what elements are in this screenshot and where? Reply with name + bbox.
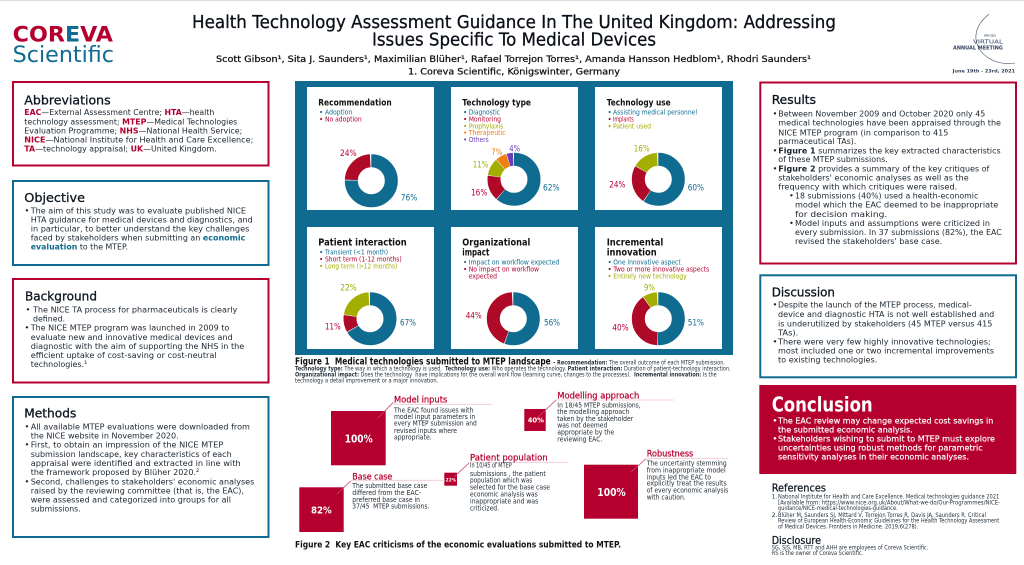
methods text: • bbox=[24, 422, 29, 432]
heading: objective: Objective bbox=[24, 190, 85, 205]
results text: Model inputs and assumptions were criticized in bbox=[795, 218, 990, 228]
methods text: Second, challenges to stakeholders' economic analyses bbox=[31, 476, 254, 486]
discussion text: device and diagnostic HTA is not well established and bbox=[778, 309, 994, 319]
discussion text: • bbox=[772, 300, 777, 310]
card: patient interaction: 11% bbox=[325, 322, 341, 332]
card: recommendation: Recommendation bbox=[318, 98, 392, 108]
card: patient interaction: Long term (>12 months) bbox=[325, 262, 397, 271]
background text: The NICE TA process for pharmaceuticals is clearly bbox=[32, 305, 237, 315]
results text: frequency with which critiques were raised. bbox=[778, 181, 957, 191]
title bbox=[192, 12, 836, 50]
references: 2. bbox=[772, 512, 778, 519]
donut: technology use bbox=[638, 159, 678, 199]
objective text: HTA guidance for medical devices and diagnostics, and bbox=[31, 215, 253, 225]
card: patient interaction: • bbox=[319, 248, 323, 257]
card: patient interaction: • bbox=[319, 262, 323, 271]
references: [Available from: https://www.nice.org.uk/About/What-we-do/Our-Programmes/NICE- bbox=[778, 500, 1000, 507]
objective text: in particular, to better understand the key challenges bbox=[31, 224, 249, 234]
figure 1 caption: Figure 1 Medical technologies submitted to MTEP landscape bbox=[295, 357, 551, 368]
authors bbox=[216, 55, 811, 78]
panel: methods bbox=[13, 397, 268, 537]
callout: modelling approach: 40% bbox=[528, 417, 544, 425]
callout: modelling approach bbox=[524, 390, 674, 444]
card: technology use bbox=[595, 87, 722, 210]
abbreviations text: NICE—National Institute for Health and Care Excellence; bbox=[24, 134, 253, 144]
card: technology use: 16% bbox=[634, 145, 650, 155]
methods text: All available MTEP evaluations were downloaded from bbox=[31, 422, 250, 432]
callout: base case bbox=[299, 471, 445, 532]
callout: modelling approach: In 18/45 MTEP submissions, bbox=[557, 400, 641, 409]
background text: defined. bbox=[33, 314, 65, 324]
card: organizational impact: 56% bbox=[544, 319, 560, 329]
discussion text: • bbox=[772, 337, 777, 347]
results text: 18 submissions (40%) used a health-economic bbox=[795, 191, 979, 201]
callout: patient population: submissions , the patient bbox=[470, 469, 546, 478]
results text: • bbox=[772, 145, 777, 155]
background text: diagnostic with the aim of supporting the NHS in the bbox=[31, 341, 244, 351]
callout: patient population: In 10/45 of MTEP bbox=[470, 461, 512, 470]
card: patient interaction: 22% bbox=[340, 284, 357, 294]
callout: model inputs: revised inputs where bbox=[394, 426, 457, 435]
panel: figure 1 charts bbox=[295, 81, 733, 355]
card: technology type: Prophylaxis bbox=[469, 122, 504, 131]
figure 1 caption: Organizational impact: Does the technology have implications for the overall work flow (learning curve, changes to the processes). Incremental innovation: Is the bbox=[295, 372, 717, 379]
conclusion text: uncertainties using robust methods for parametric bbox=[778, 442, 983, 452]
card: technology type bbox=[451, 87, 578, 210]
references: guidance/NICE-medical-technologies-guidance. bbox=[778, 505, 898, 512]
logo: Coreva Scientific: Scientific bbox=[13, 43, 114, 68]
background text: evaluate new and innovative medical devices and bbox=[31, 332, 233, 342]
card: incremental innovation: • bbox=[608, 258, 612, 267]
results text: Figure 1 summarizes the key extracted characteristics bbox=[778, 145, 1001, 155]
card: incremental innovation: 51% bbox=[688, 319, 704, 329]
callout: model inputs: Model inputs bbox=[394, 394, 447, 405]
figure 2 caption: Figure 2 Key EAC criticisms of the economic evaluations submitted to MTEP. bbox=[295, 541, 621, 551]
results text: • bbox=[789, 218, 794, 228]
figure 1 caption bbox=[295, 357, 731, 384]
card: technology use: Patient used bbox=[613, 122, 651, 131]
donut: organizational impact bbox=[493, 299, 533, 339]
conclusion text: • bbox=[772, 433, 777, 443]
card: technology type: Therapeutic bbox=[468, 128, 506, 137]
donut: recommendation bbox=[351, 161, 391, 201]
card: incremental innovation bbox=[595, 227, 722, 349]
abbreviations text bbox=[24, 107, 253, 153]
logo: HTAi virtual annual meeting: HTAi 2021 bbox=[984, 34, 996, 38]
logo: HTAi virtual annual meeting: June 19th - 23rd, 2021 bbox=[952, 68, 1015, 74]
callout: model inputs: model input parameters in bbox=[394, 412, 475, 421]
callout: modelling approach: appropriate by the bbox=[557, 428, 615, 437]
callout: patient population: criticized. bbox=[470, 503, 499, 512]
methods text: the NICE website in November 2020. bbox=[31, 431, 179, 441]
heading: methods: Methods bbox=[24, 406, 76, 421]
methods text: the framework proposed by Blüher 2020.² bbox=[31, 467, 199, 477]
card: technology use: • bbox=[608, 108, 612, 117]
results text: • bbox=[772, 109, 777, 119]
card: technology type: Technology type bbox=[462, 98, 531, 108]
abbreviations text: TA—technology appraisal; UK—United Kingdom. bbox=[24, 143, 217, 153]
logo: HTAi virtual annual meeting bbox=[952, 14, 1015, 74]
methods text: submission landscape, key characteristics of each bbox=[31, 449, 232, 459]
card: organizational impact: Organizational bbox=[462, 237, 530, 248]
card: technology type: Others bbox=[469, 135, 489, 144]
card: incremental innovation: • bbox=[608, 265, 612, 274]
callout: robustness: from inappropriate model bbox=[647, 465, 726, 474]
heading: abbreviations: Abbreviations bbox=[24, 92, 111, 107]
logo: Coreva Scientific bbox=[13, 23, 114, 68]
card: organizational impact: No impact on workflow bbox=[469, 265, 539, 274]
heading: background: Background bbox=[25, 289, 97, 304]
card: patient interaction: 67% bbox=[400, 319, 416, 329]
authors: Scott Gibson¹, Sita J. Saunders¹, Maximilian Blüher¹, Rafael Torrejon Torres¹, Amanda Hansson Hedblom¹, Rhodri Saunders¹ bbox=[216, 55, 811, 65]
card: recommendation: 76% bbox=[401, 193, 417, 203]
discussion text: most included one or two incremental improvements bbox=[778, 346, 994, 356]
card: recommendation: • bbox=[319, 115, 323, 124]
callout: model inputs: The EAC found issues with bbox=[393, 405, 473, 414]
abbreviations text: Evaluation Programme; NHS—National Health Service; bbox=[24, 125, 242, 135]
results text: NICE MTEP program (in comparison to 415 bbox=[778, 127, 948, 137]
callout: robustness: of every economic analysis bbox=[647, 486, 728, 495]
card: incremental innovation: 9% bbox=[644, 284, 655, 294]
callout: patient population: selected for the base case bbox=[470, 483, 550, 492]
methods text: submissions. bbox=[31, 503, 81, 513]
disclosure: SG, SJS, MB, RTT and AHH are employees of Coreva Scientific. bbox=[772, 544, 928, 551]
card: technology type: Monitoring bbox=[469, 115, 501, 124]
card: organizational impact: 44% bbox=[466, 311, 482, 321]
heading: conclusion: Conclusion bbox=[772, 393, 873, 417]
card: technology use: • bbox=[608, 122, 612, 131]
callout: robustness: The uncertainty stemming bbox=[646, 458, 727, 467]
panel: objective bbox=[13, 181, 268, 265]
card: recommendation: No adoption bbox=[325, 115, 362, 124]
callout: robustness: Robustness bbox=[647, 448, 693, 459]
card: incremental innovation: One innovative aspect bbox=[613, 258, 681, 267]
references: 1. bbox=[772, 494, 778, 501]
callout: robustness bbox=[584, 448, 728, 519]
card: patient interaction: Patient interaction bbox=[318, 237, 407, 248]
callout: patient population: population which was bbox=[470, 476, 532, 485]
callout: robustness: inputs led the EAC to bbox=[647, 472, 711, 481]
callout: robustness: with caution. bbox=[647, 493, 686, 502]
card: incremental innovation: • bbox=[608, 271, 612, 280]
card: patient interaction: Transient (<1 month) bbox=[324, 248, 388, 257]
logo: Coreva Scientific: COREVA bbox=[13, 23, 113, 48]
conclusion text: • bbox=[772, 415, 777, 425]
callout: modelling approach: reviewing EAC. bbox=[557, 435, 602, 444]
conclusion text: sensitivity analyses in their economic analyses. bbox=[778, 451, 969, 461]
card: technology use: • bbox=[608, 115, 612, 124]
abbreviations text: technology assessment; MTEP—Medical Technologies bbox=[24, 116, 237, 126]
heading: results: Results bbox=[772, 92, 816, 107]
card: technology type: 16% bbox=[471, 188, 487, 198]
disclosure bbox=[772, 535, 928, 557]
card: technology type: • bbox=[463, 128, 467, 137]
background text: • bbox=[24, 323, 29, 333]
callout: robustness: 100% bbox=[597, 487, 626, 499]
background text: The NICE MTEP program was launched in 2009 to bbox=[30, 323, 229, 333]
callout: robustness: explicitly treat the results bbox=[647, 479, 727, 488]
results text: • bbox=[772, 164, 777, 174]
disclosure: Disclosure bbox=[772, 535, 821, 547]
methods text: raised by the reviewing committee (that is, the EAC), bbox=[31, 485, 244, 495]
card: recommendation: 24% bbox=[340, 149, 357, 159]
results text: stakeholders' economic analyses as well as the bbox=[778, 172, 969, 182]
references: References bbox=[772, 482, 826, 494]
card: organizational impact: impact bbox=[462, 248, 490, 259]
figure 1 caption: - Recommendation: The overall outcome of each MTEP submission. bbox=[553, 360, 725, 367]
card: incremental innovation: Two or more innovative aspects bbox=[612, 265, 710, 274]
conclusion text: the submitted economic analysis. bbox=[778, 424, 913, 434]
card: technology use: Assisting medical personnel bbox=[613, 108, 697, 117]
background text: technologies.¹ bbox=[31, 359, 87, 369]
methods text: • bbox=[24, 440, 29, 450]
figure 1 caption: technology a detail improvement or a major innovation. bbox=[295, 377, 438, 384]
card: technology type: • bbox=[463, 135, 467, 144]
results text: every submission. In 37 submissions (82%), the EAC bbox=[795, 227, 1002, 237]
results text: Between November 2009 and October 2020 only 45 bbox=[778, 109, 985, 119]
heading: discussion: Discussion bbox=[772, 285, 835, 300]
callout: model inputs: appropriate. bbox=[394, 433, 432, 442]
card: incremental innovation: innovation bbox=[607, 248, 657, 259]
discussion text: TAs). bbox=[777, 327, 798, 337]
discussion text: There were very few highly innovative technologies; bbox=[777, 337, 991, 347]
objective text: The aim of this study was to evaluate published NICE bbox=[30, 205, 246, 215]
results text: revised the stakeholders' base case. bbox=[795, 236, 942, 246]
results text: for decision making. bbox=[795, 209, 887, 219]
conclusion text: The EAC review may change expected cost savings in bbox=[777, 415, 993, 425]
results text: model which the EAC deemed to be inappropriate bbox=[795, 200, 998, 210]
discussion text: is underutilized by stakeholders (45 MTEP versus 415 bbox=[778, 319, 992, 329]
disclosure: RS is the owner of Coreva Scientific. bbox=[772, 550, 863, 557]
conclusion text bbox=[772, 415, 995, 461]
discussion text: Despite the launch of the MTEP process, medical- bbox=[778, 300, 972, 310]
card: organizational impact: Impact on workflow expected bbox=[469, 258, 559, 267]
card: technology use: Implants bbox=[613, 115, 634, 124]
abbreviations text: EAC—External Assessment Centre; HTA—health bbox=[24, 107, 214, 117]
card: incremental innovation: Incremental bbox=[607, 237, 663, 248]
background text: efficient uptake of cost-saving or cost-neutral bbox=[31, 350, 217, 360]
card: technology use: 24% bbox=[609, 181, 625, 191]
methods text: • bbox=[24, 476, 29, 486]
callout: modelling approach: the modelling approach bbox=[557, 407, 629, 416]
panel: discussion bbox=[760, 275, 1016, 377]
conclusion text: Stakeholders wishing to submit to MTEP must explore bbox=[778, 433, 995, 443]
results text: of these MTEP submissions. bbox=[778, 154, 888, 164]
results text bbox=[772, 109, 1002, 246]
panel: background bbox=[13, 279, 268, 382]
card: recommendation: • bbox=[319, 108, 323, 117]
card: recommendation: Adoption bbox=[325, 108, 352, 117]
card: incremental innovation: Entirely new technology bbox=[613, 271, 687, 280]
methods text: First, to obtain an impression of the NICE MTEP bbox=[31, 440, 223, 450]
card: technology type: 62% bbox=[543, 184, 560, 194]
logo: HTAi virtual annual meeting: VIRTUAL bbox=[973, 39, 1004, 45]
callout: patient population: 22% bbox=[446, 478, 457, 483]
donut: incremental innovation bbox=[638, 299, 678, 339]
discussion text bbox=[772, 300, 994, 365]
discussion text: to existing technologies. bbox=[778, 355, 877, 365]
card: technology type: 11% bbox=[473, 160, 488, 170]
methods text: were assessed and categorized into groups for all bbox=[31, 494, 231, 504]
callout: modelling approach: was not deemed bbox=[557, 421, 607, 430]
callout: patient population: economic analysis was bbox=[470, 490, 538, 499]
donut: patient interaction bbox=[350, 299, 390, 339]
card: technology type: • bbox=[463, 108, 467, 117]
background text bbox=[24, 305, 244, 369]
panel: results bbox=[760, 82, 1016, 264]
card: organizational impact: • bbox=[463, 258, 467, 267]
logo: HTAi virtual annual meeting: ANNUAL MEETING bbox=[953, 45, 1003, 51]
title: Issues Specific To Medical Devices bbox=[372, 29, 656, 50]
callout: patient population: inappropriate and was bbox=[470, 496, 538, 505]
results text: medical technologies have been appraised through the bbox=[778, 118, 1001, 128]
results text: • bbox=[789, 191, 794, 201]
results text: Figure 2 provides a summary of the key critiques of bbox=[778, 164, 990, 174]
card: patient interaction: • bbox=[319, 255, 323, 264]
objective text: evaluation to the MTEP. bbox=[31, 242, 128, 252]
references: of Medical Devices. Frontiers in Medicine. 2019;6(278). bbox=[778, 524, 918, 531]
methods text bbox=[24, 422, 254, 513]
background text: • bbox=[26, 305, 30, 315]
methods text: appraisal were identified and extracted in line with bbox=[31, 458, 241, 468]
callout: base case: preferred base case in bbox=[352, 495, 420, 504]
references bbox=[772, 482, 1000, 531]
card: organizational impact: expected bbox=[469, 271, 497, 280]
card: technology use: Technology use bbox=[607, 98, 671, 108]
references: Blüher M, Saunders SJ, Mittard V, Torrejon Torres R, Davis JA, Saunders R. Critical bbox=[778, 512, 986, 519]
card: organizational impact: • bbox=[463, 265, 467, 274]
objective text: faced by stakeholders when submitting an economic bbox=[31, 233, 245, 243]
donut: technology type bbox=[494, 159, 534, 199]
title: Health Technology Assessment Guidance In The United Kingdom: Addressing bbox=[192, 12, 836, 33]
card: patient interaction: Short term (1-12 months) bbox=[325, 255, 402, 264]
figure 1 caption: Technology type: The way in which a technology is used. Technology use: Who operates the technology. Patient interaction: Duration of patient-technology interaction. bbox=[295, 366, 731, 373]
card: technology use: 60% bbox=[688, 184, 704, 194]
panel: abbreviations bbox=[13, 82, 268, 166]
card: incremental innovation: 40% bbox=[612, 324, 629, 334]
card: recommendation bbox=[307, 87, 434, 210]
card: technology type: Diagnostic bbox=[469, 108, 500, 117]
callout: modelling approach: taken by the stakeholder bbox=[557, 414, 633, 423]
callout: modelling approach: Modelling approach bbox=[557, 390, 639, 401]
callout: model inputs: every MTEP submission and bbox=[394, 419, 477, 428]
callout: patient population: Patient population bbox=[470, 452, 548, 463]
card: patient interaction bbox=[307, 227, 434, 349]
callout: base case: 82% bbox=[311, 505, 332, 516]
callout: model inputs bbox=[331, 394, 492, 465]
authors: 1. Coreva Scientific, Königswinter, Germany bbox=[408, 68, 620, 78]
card: technology type: 4% bbox=[509, 145, 520, 155]
card: organizational impact bbox=[451, 227, 578, 349]
callout: base case: differed from the EAC- bbox=[352, 488, 421, 497]
objective text bbox=[24, 205, 253, 252]
callout: base case: The submitted base case bbox=[351, 481, 428, 490]
callout: model inputs: 100% bbox=[345, 433, 373, 445]
callout: patient population bbox=[444, 452, 568, 512]
panel: conclusion bbox=[759, 385, 1016, 474]
objective text: • bbox=[24, 205, 29, 215]
card: technology type: • bbox=[463, 115, 467, 124]
results text: parmaceutical TAs). bbox=[778, 136, 856, 146]
card: technology type: 7% bbox=[491, 148, 502, 158]
callout: base case: Base case bbox=[352, 471, 393, 482]
callout: base case: 37/45 MTEP submissions. bbox=[352, 501, 429, 510]
card: technology type: • bbox=[463, 122, 467, 131]
